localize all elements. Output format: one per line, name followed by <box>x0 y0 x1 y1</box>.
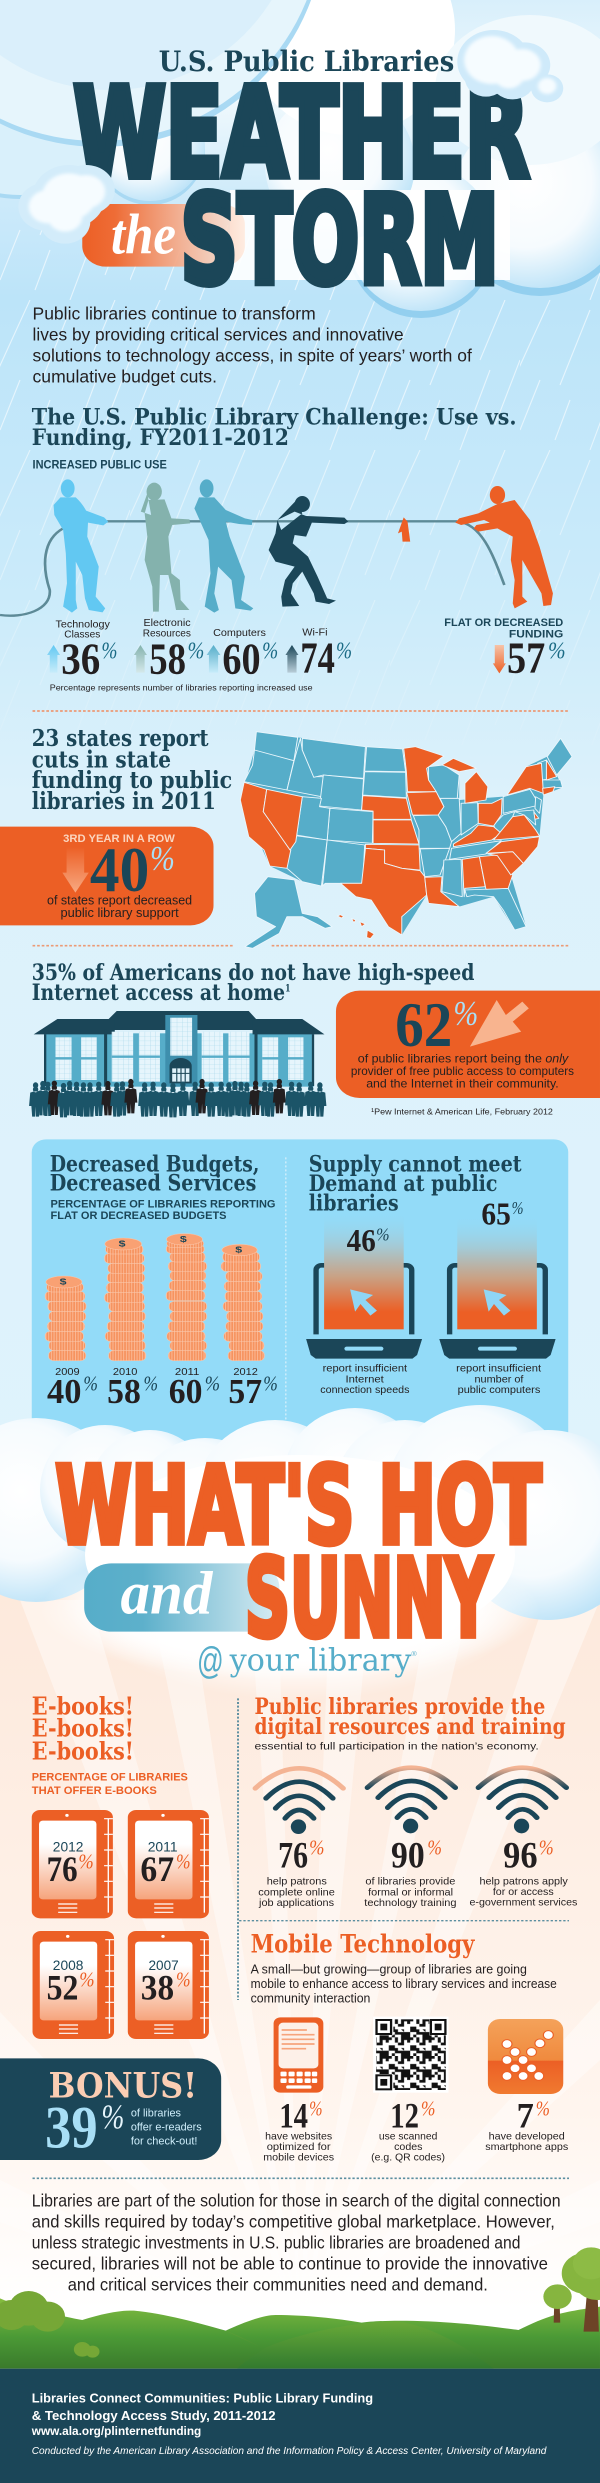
wifi stat: technology training 90%: technology training <box>364 1898 457 1909</box>
logo: @ your library <box>197 1639 417 1682</box>
laptop: public computers 65%: number of <box>474 1374 523 1385</box>
wifi stat: technology training 90%: formal or informal <box>368 1887 453 1898</box>
stat: technology classes 36%: Technology <box>55 619 110 630</box>
wifi stat: e-government services 96%: 96 <box>503 1834 538 1876</box>
values: yearly budget percentages: 58 <box>107 1372 141 1411</box>
callout: 40% of states <box>0 827 214 925</box>
stat: scanned codes 12% <box>371 2096 445 2163</box>
coin stack 2009 <box>45 1276 86 1361</box>
heading: 35% of Americans <box>32 960 474 1006</box>
wifi stat: technology training 90%: of libraries provide <box>365 1876 455 1887</box>
stat: electronic resources 58%: Resources <box>143 628 191 639</box>
stat: smartphone apps 7%: have developed <box>489 2131 565 2142</box>
laptop: public computers 65%: public computers <box>458 1385 540 1396</box>
laptop: internet speeds 46%: 46 <box>347 1224 376 1258</box>
laptop: public computers 65%: 65 <box>481 1197 511 1232</box>
tablet: 2012 76% <box>32 1810 113 1918</box>
stat: wi-fi 74%: % <box>336 637 352 664</box>
laptop: public computers 65% <box>439 1197 556 1396</box>
stat: electronic resources 58%: Electronic <box>143 618 191 629</box>
values: yearly budget percentages: 2012 <box>233 1368 258 1378</box>
wifi stat: technology training 90%: 90 <box>391 1834 425 1876</box>
small cloud top right <box>457 30 563 102</box>
callout: bonus e-readers: BONUS! <box>49 2065 197 2106</box>
stat: smartphone apps 7% <box>485 2096 568 2153</box>
stat: websites 14%: mobile devices <box>263 2152 334 2163</box>
wifi stat: job applications 76% <box>255 1768 343 1909</box>
stat: flat or decreased funding 57% <box>444 618 566 683</box>
intro paragraph: lives by providing critical services and innovative <box>33 325 404 345</box>
laptop: internet speeds 46%: connection speeds <box>320 1385 409 1396</box>
wifi stat: job applications 76%: complete online <box>258 1887 335 1898</box>
coin stack 2010: $ <box>119 1239 126 1249</box>
stat: computers 60% <box>207 628 278 684</box>
section: e-books, wifi, mobile <box>32 1693 577 2094</box>
heading: 35% of Americans: 1 <box>285 982 290 994</box>
heading: E-books: E-books! <box>32 1715 134 1743</box>
rope <box>0 521 504 616</box>
section: use vs funding <box>0 404 566 693</box>
footer <box>0 2369 600 2483</box>
logo: @ your library: ® <box>411 1650 417 1658</box>
wifi stat: job applications 76%: help patrons <box>267 1876 327 1887</box>
callout: 62% of public libraries <box>336 989 600 1098</box>
hills <box>0 2298 600 2369</box>
tablet: 2011 67%: 2011 <box>148 1840 178 1855</box>
blue "and" pill: and <box>121 1559 213 1627</box>
label: percentage of libraries that offer e-books: THAT OFFER E-BOOKS <box>32 1784 157 1797</box>
icon: phone <box>274 2017 323 2093</box>
label: percentage of libraries that offer e-books <box>32 1770 188 1797</box>
callout: bonus e-readers: % <box>101 2098 124 2137</box>
logo: @ your library: your library <box>229 1642 412 1678</box>
sunny clouds band <box>0 1405 600 1700</box>
text: mobile intro: A small—but growing—group of libraries are going <box>251 1962 527 1976</box>
laptop: public computers 65%: % <box>512 1198 523 1219</box>
values: yearly budget percentages: 40 <box>47 1372 82 1411</box>
heading: E-books <box>32 1693 134 1766</box>
heading: decreased budgets <box>50 1151 276 1222</box>
blue "and" pill <box>84 1559 279 1632</box>
section: bonus, mobile stats, closing, footer <box>0 2058 600 2483</box>
coin stack 2012 <box>221 1244 264 1361</box>
trees <box>543 2247 600 2332</box>
values: yearly budget percentages: % <box>205 1372 220 1395</box>
values: yearly budget percentages: 57 <box>228 1372 262 1411</box>
callout: 40% of states: of states report decreased <box>47 894 192 907</box>
heading: supply cannot meet demand <box>309 1151 522 1216</box>
tablet: 2008 52%: 52 <box>47 1968 78 2008</box>
orange "the" pill: the <box>111 203 176 266</box>
text: mobile intro <box>251 1962 557 2005</box>
small cloud left <box>18 165 115 244</box>
text: mobile intro: community interaction <box>251 1992 370 2005</box>
figure: woman wi-fi <box>269 496 348 607</box>
footer: Libraries Connect Communities: Public Library Funding <box>32 2391 373 2405</box>
wifi stat: technology training 90%: % <box>427 1836 442 1859</box>
callout: 62% of public libraries: 62 <box>395 989 452 1060</box>
heading: 23 states: funding to public <box>32 766 232 794</box>
rope flag <box>398 517 410 542</box>
tagline: essential to full participation: essential to full participation in the nation’s economy. <box>254 1741 539 1752</box>
wifi stat: technology training 90% <box>364 1768 457 1909</box>
section: hero title <box>18 30 563 387</box>
callout: 62% of public libraries: % <box>453 994 478 1033</box>
callout: bonus e-readers <box>0 2058 221 2161</box>
heading: 23 states: 23 states report <box>32 724 209 752</box>
stat: scanned codes 12%: % <box>421 2097 435 2120</box>
stat: smartphone apps 7%: % <box>536 2097 550 2120</box>
coin stack 2012: $ <box>235 1245 243 1255</box>
callout: 40% of states: 3RD YEAR IN A ROW <box>63 832 176 845</box>
footer: www.ala.org/plinternetfunding <box>31 2425 201 2438</box>
stat: technology classes 36% <box>47 619 117 684</box>
chart: coin stacks <box>45 1234 264 1361</box>
map: US states <box>240 732 572 948</box>
stat: websites 14% <box>263 2096 334 2163</box>
figure: man computers <box>194 479 253 613</box>
wifi stat: e-government services 96%: % <box>539 1836 554 1859</box>
heading: E-books: E-books! <box>32 1693 134 1721</box>
heading: decreased budgets: PERCENTAGE OF LIBRARIES REPORTING <box>51 1197 276 1210</box>
tablet: 2008 52% <box>33 1931 114 2039</box>
heading: 23 states: libraries in 2011 <box>32 787 216 815</box>
storm clouds behind title <box>0 0 600 318</box>
stat: technology classes 36%: % <box>101 637 117 664</box>
values: yearly budget percentages <box>47 1368 278 1411</box>
tablet: 2008 52%: % <box>79 1968 95 1991</box>
intro paragraph: cumulative budget cuts. <box>33 367 217 387</box>
heading: 35% of Americans: Internet access at home <box>32 980 285 1006</box>
stat: electronic resources 58%: % <box>187 637 204 664</box>
heading: decreased budgets: FLAT OR DECREASED BUDGETS <box>51 1209 227 1222</box>
tablet: 2011 67% <box>128 1810 209 1918</box>
heading: 23 states <box>32 724 232 815</box>
label: increased public use: INCREASED PUBLIC USE <box>33 457 167 471</box>
laptop: internet speeds 46% <box>306 1212 422 1396</box>
values: yearly budget percentages: % <box>143 1372 158 1395</box>
heading: supply cannot meet demand: Supply cannot meet <box>309 1151 522 1177</box>
tablet: 2011 67%: % <box>176 1850 191 1873</box>
heading: decreased budgets: Decreased Budgets, <box>50 1151 259 1177</box>
stat: smartphone apps 7%: 7 <box>517 2096 534 2136</box>
tablet: 2012 76%: 2012 <box>53 1840 83 1855</box>
callout: 62% of public libraries: and the Internet in their community. <box>366 1076 559 1090</box>
stat: scanned codes 12%: 12 <box>390 2096 419 2136</box>
values: yearly budget percentages: 2011 <box>175 1368 200 1378</box>
footnote: percentage note: Percentage represents number of libraries reporting increased use <box>50 683 313 693</box>
laptop: public computers 65%: report insufficient <box>456 1363 541 1374</box>
stat: computers 60%: Computers <box>213 628 266 639</box>
logo: @ your library: @ <box>197 1639 224 1682</box>
stat: electronic resources 58%: 58 <box>149 634 186 684</box>
heading: digital resources <box>254 1694 566 1740</box>
callout: bonus e-readers: of libraries <box>131 2106 181 2119</box>
values: yearly budget percentages: % <box>83 1372 98 1395</box>
wifi stat: job applications 76%: 76 <box>278 1834 308 1876</box>
stat: websites 14%: optimized for <box>267 2142 331 2153</box>
heading: use vs funding: Funding, FY2011-2012 <box>32 425 289 451</box>
wifi stat: e-government services 96%: help patrons apply <box>479 1876 568 1887</box>
stat: websites 14%: % <box>309 2097 323 2120</box>
callout: bonus e-readers: 39 <box>45 2094 98 2161</box>
tablet: 2011 67%: 67 <box>140 1849 174 1889</box>
stat: websites 14%: have websites <box>265 2131 332 2142</box>
footer: & Technology Access Study, 2011-2012 <box>32 2408 276 2423</box>
laptop: internet speeds 46%: report insufficient <box>323 1363 407 1374</box>
stat: wi-fi 74% <box>285 627 352 683</box>
intro paragraph: solutions to technology access, in spite of years’ worth of <box>33 346 472 366</box>
stat: electronic resources 58% <box>134 618 204 684</box>
callout: 62% of public libraries: of public libraries report being the only <box>358 1052 570 1065</box>
callout: 40% of states: % <box>150 839 175 878</box>
icon: smartphone app <box>488 2019 563 2094</box>
coin stack 2010 <box>104 1238 146 1361</box>
tablet: 2008 52%: 2008 <box>53 1958 83 1974</box>
stat: flat or decreased funding 57%: 57 <box>507 634 545 683</box>
wifi stat: e-government services 96%: for or access <box>493 1887 554 1898</box>
callout: 40% of states: public library support <box>60 906 179 920</box>
section: state funding and internet access <box>0 711 600 1117</box>
illustration: library building <box>34 1011 324 1087</box>
icon: QR code <box>373 2017 448 2093</box>
values: yearly budget percentages: % <box>263 1372 278 1395</box>
coin stack 2011: $ <box>180 1235 187 1244</box>
text: closing paragraph <box>32 2191 561 2295</box>
laptop: internet speeds 46%: % <box>376 1225 390 1245</box>
stat: technology classes 36%: 36 <box>61 634 100 684</box>
values: yearly budget percentages: 2010 <box>113 1368 138 1378</box>
tablet: 2007 38%: % <box>176 1968 191 1991</box>
heading: E-books: E-books! <box>32 1738 134 1766</box>
label: percentage of libraries that offer e-books: PERCENTAGE OF LIBRARIES <box>32 1770 188 1783</box>
heading: decreased budgets: Decreased Services <box>50 1170 256 1196</box>
wifi stat: e-government services 96%: e-government services <box>470 1897 577 1908</box>
figure: orange funding man <box>455 486 553 608</box>
callout: bonus e-readers: offer e-readers <box>131 2120 202 2133</box>
heading: supply cannot meet demand: libraries <box>309 1190 399 1216</box>
heading: U.S. Public Libraries: U.S. Public Libraries <box>159 46 454 78</box>
wifi stat: e-government services 96% <box>470 1768 577 1908</box>
footnote: Pew Internet: ¹Pew Internet & American Life, February 2012 <box>371 1107 553 1117</box>
figure: woman electronic resources <box>141 483 190 612</box>
coin stack 2009: $ <box>60 1277 67 1287</box>
intro paragraph: Public libraries continue to transform <box>33 304 316 324</box>
values: yearly budget percentages: 2009 <box>55 1368 80 1378</box>
stat: smartphone apps 7%: smartphone apps <box>485 2142 568 2153</box>
wifi stat: job applications 76%: job applications <box>258 1898 334 1909</box>
callout: bonus e-readers: for check-out! <box>131 2134 197 2147</box>
coin stack 2011 <box>166 1234 207 1361</box>
heading: supply cannot meet demand: Demand at public <box>309 1171 497 1197</box>
tablet: 2007 38%: 2007 <box>148 1958 179 1974</box>
stat: scanned codes 12%: (e.g. QR codes) <box>371 2152 445 2163</box>
stat: flat or decreased funding 57%: FLAT OR DECREASED <box>444 618 563 629</box>
stat: scanned codes 12%: codes <box>394 2142 422 2153</box>
stat: computers 60%: 60 <box>222 634 261 684</box>
stat: flat or decreased funding 57%: FUNDING <box>509 629 563 640</box>
panel background <box>32 1139 568 1473</box>
tablet: 2012 76%: 76 <box>47 1849 78 1889</box>
wifi stat: job applications 76%: % <box>309 1836 324 1859</box>
laptop: internet speeds 46%: Internet <box>346 1374 384 1385</box>
stat: scanned codes 12%: use scanned <box>379 2131 437 2142</box>
intro paragraph <box>33 304 472 387</box>
stat: wi-fi 74%: Wi-Fi <box>302 627 328 638</box>
text: closing paragraph: and critical services their communities need and demand. <box>68 2275 488 2295</box>
tablet: 2007 38% <box>128 1931 209 2039</box>
stat: websites 14%: 14 <box>279 2096 308 2136</box>
values: yearly budget percentages: 60 <box>169 1372 202 1411</box>
stat: wi-fi 74%: 74 <box>300 634 335 683</box>
bushes <box>0 2291 99 2358</box>
stat: technology classes 36%: Classes <box>64 629 100 640</box>
tablet: 2012 76%: % <box>78 1850 94 1873</box>
section: budgets and demand panel <box>32 1139 568 1473</box>
heading: 23 states: cuts in state <box>32 745 171 773</box>
orange "the" pill <box>82 203 245 267</box>
sun rays <box>0 1600 600 2330</box>
stat: flat or decreased funding 57%: % <box>548 637 566 664</box>
heading: use vs funding <box>32 404 517 451</box>
callout: 40% of states: 40 <box>90 834 149 905</box>
stat: computers 60%: % <box>262 637 278 664</box>
tablet: 2007 38%: 38 <box>141 1968 174 2008</box>
rain <box>0 230 600 676</box>
figure: man technology <box>54 479 108 613</box>
illustration: crowd of people <box>29 1079 326 1117</box>
heading: mobile technology: Mobile Technology <box>251 1929 475 1959</box>
section: what's hot and sunny <box>55 1444 566 2000</box>
